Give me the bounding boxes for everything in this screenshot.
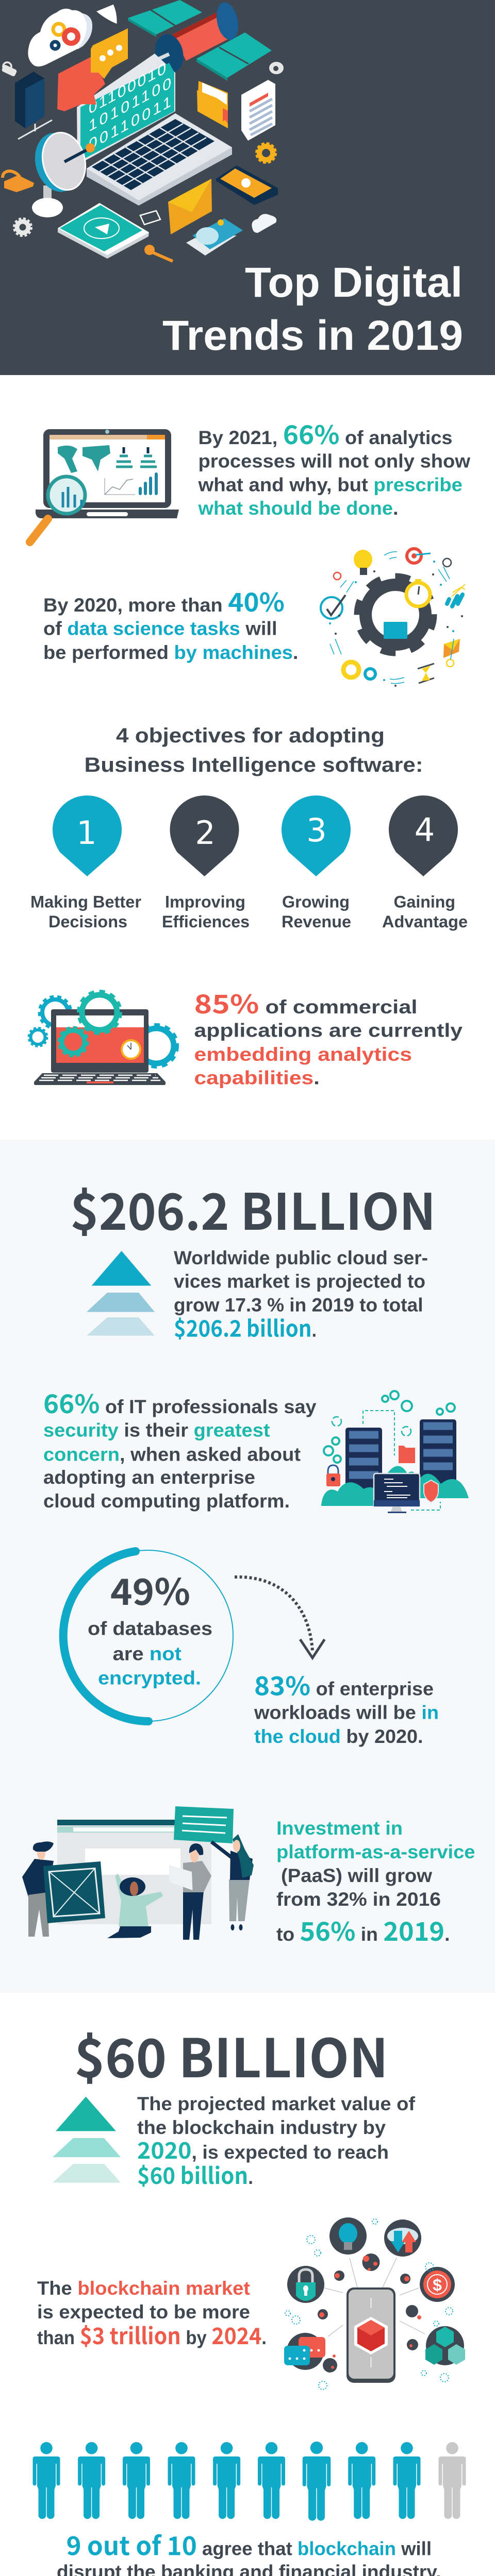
icon: bulb circle — [329, 2217, 367, 2255]
icon: teal stacked pyramid — [53, 2097, 121, 2182]
panel: cloud section background — [0, 1140, 495, 1993]
objective 1: Making Better — [30, 892, 141, 911]
objective 3: Growing — [282, 892, 350, 911]
text: blockchain industry value: $60 billion. — [137, 2158, 253, 2191]
icon: yellow speech bubble — [91, 28, 128, 79]
illustration: blockchain phone network — [284, 2217, 465, 2389]
text: 9 out of 10 agree: 9 out of 10 agree that blockchain will — [66, 2526, 432, 2563]
small node dots — [318, 2270, 421, 2372]
icon: red speech bubble — [57, 56, 105, 111]
text: blockchain industry value: the blockchain industry by — [137, 2117, 386, 2138]
text: 66 percent analytics: By 2021, 66% of analytics — [198, 415, 453, 452]
callout: 49 percent databases — [62, 1550, 233, 1721]
heading: 4 objectives: Business Intelligence software: — [85, 754, 423, 776]
text: 3 trillion blockchain market: is expected to be more — [37, 2301, 250, 2323]
icon: folder — [197, 81, 228, 128]
icon: tablet with play button — [58, 203, 149, 259]
figure: kneeling person — [107, 1874, 163, 1938]
heading: 206.2 billion: $206.2 BILLION — [70, 1172, 436, 1244]
objective 4: Advantage — [382, 912, 468, 931]
icon: satellite — [128, 0, 272, 81]
text: public cloud market: Worldwide public cloud ser- — [174, 1247, 428, 1268]
icon: yellow gear — [256, 143, 276, 163]
pictogram: 9 of 10 people — [33, 2442, 466, 2521]
panel: header — [0, 0, 495, 375]
icon: small diamond — [140, 211, 160, 225]
icon: dollar coin: $ — [433, 2276, 442, 2294]
icon: key — [144, 245, 173, 261]
icon: laptop with binary screen: 00110011 — [89, 92, 171, 154]
text: platform as a service: Investment in — [276, 1818, 403, 1839]
icon: laptop with magnifying glass — [30, 429, 179, 542]
objective 1: Decisions — [48, 912, 127, 931]
objective 4 — [382, 795, 468, 931]
text: 66 percent analytics: what and why, but prescribe — [197, 474, 463, 496]
text: 66 percent analytics: what should be done . — [197, 498, 398, 519]
heading: 4 objectives: 4 objectives for adopting — [116, 724, 385, 747]
text: 83 percent workloads: workloads will be in — [254, 1702, 439, 1723]
heading: 4 objectives — [85, 724, 423, 776]
icon: lock right — [269, 62, 284, 74]
icon: cloud servers illustration — [321, 1391, 469, 1513]
text: 40 percent data science: of data science tasks will — [43, 618, 277, 639]
text: platform as a service: (PaaS) will grow — [281, 1865, 432, 1886]
text: 66 percent security — [43, 1384, 317, 1512]
objective 2: 2 — [195, 814, 216, 852]
text: 66 percent security: adopting an enterprise — [43, 1467, 255, 1488]
icon: envelope — [168, 179, 212, 234]
icon: automation gear illustration — [321, 549, 465, 687]
text: 66 percent security: cloud computing platform. — [43, 1490, 290, 1512]
objective 4: 4 — [415, 811, 435, 849]
title: Trends in 2019 — [162, 312, 463, 359]
sparkle accents — [285, 2219, 453, 2389]
callout: 49 percent databases: of databases — [88, 1618, 212, 1639]
heading: 60 billion: $60 BILLION — [74, 2016, 388, 2093]
icon: blue stacked pyramid — [87, 1251, 155, 1335]
text: 66 percent security: security is their greatest — [43, 1420, 270, 1440]
text: platform as a service: to 56% in 2019. — [276, 1911, 450, 1948]
icon: blocks circle — [425, 2326, 465, 2365]
icon: document — [241, 80, 275, 141]
text: public cloud market: grow 17.3 % in 2019 to total — [174, 1294, 423, 1316]
text: public cloud market: vices market is projected to — [174, 1270, 425, 1292]
text: public cloud market — [174, 1247, 428, 1344]
title: Top Digital — [245, 259, 463, 306]
icon: phone — [216, 165, 278, 205]
icon: cloud arrows circle — [384, 2219, 421, 2257]
text: 40 percent data science: be performed by machines. — [43, 642, 299, 663]
icon: small cloud — [252, 214, 276, 233]
objective 1: 1 — [76, 814, 97, 852]
callout: 49 percent databases: are not — [112, 1643, 182, 1664]
text: 85 percent embedded analytics — [194, 984, 463, 1088]
text: blockchain industry value — [137, 2093, 416, 2191]
icon: network node circle — [362, 2253, 380, 2271]
text: 40 percent data science: By 2020, more than 40% — [43, 582, 285, 619]
illustration: isometric technology laptop — [1, 0, 284, 261]
objective 3: Revenue — [282, 912, 351, 931]
icon: laptop with gears — [29, 991, 177, 1085]
objective 2 — [162, 795, 250, 931]
icon: shield — [96, 4, 117, 24]
objective 3 — [282, 795, 351, 931]
text: public cloud market: $206.2 billion. — [174, 1311, 317, 1344]
callout: 49 percent databases: 49% — [110, 1564, 190, 1616]
objective 3: 3 — [306, 811, 327, 849]
objective 4: Gaining — [394, 892, 455, 911]
figure: woman holding card — [211, 1834, 254, 1930]
icon: dollar coin — [420, 2267, 455, 2302]
text: 85 percent embedded analytics: 85% of commercial — [194, 984, 418, 1021]
icon: credit cards — [186, 218, 243, 256]
icon: lock circle — [287, 2266, 324, 2303]
icon: laptop with binary screen: 10101100 — [89, 74, 171, 135]
icon: orange padlock — [3, 171, 34, 192]
icon: laptop with binary screen: 01100010 — [89, 59, 166, 118]
objective 2: Improving — [165, 892, 245, 911]
text: 83 percent workloads: 83% of enterprise — [254, 1666, 434, 1703]
text: blockchain industry value: 2020, is expected to reach — [137, 2132, 389, 2165]
text: 66 percent security: concern, when asked about — [43, 1444, 301, 1465]
text: 3 trillion blockchain market — [37, 2278, 267, 2351]
text: 66 percent analytics — [197, 415, 470, 519]
icon: white gear — [14, 218, 31, 236]
text: blockchain industry value: The projected market value of — [137, 2093, 416, 2114]
figure: left person with frame — [22, 1841, 105, 1937]
text: 66 percent security: 66% of IT professionals say — [43, 1384, 317, 1421]
icon: chat bubbles circle — [284, 2333, 325, 2370]
arrow: databases to workloads — [235, 1577, 325, 1658]
illustration: team building a web page — [22, 1806, 254, 1940]
icon: cloud with gears — [28, 9, 92, 66]
text: 3 trillion blockchain market: The blockchain market — [37, 2278, 250, 2299]
text: 83 percent workloads — [254, 1666, 439, 1747]
icon: laptop with binary screen — [77, 54, 232, 206]
icon: satellite dish — [29, 127, 95, 217]
callout: 49 percent databases: encrypted. — [98, 1667, 201, 1689]
text: platform as a service — [276, 1818, 475, 1948]
objective 1 — [30, 795, 141, 931]
figure: man with paper — [169, 1843, 211, 1940]
text: 3 trillion blockchain market: than $3 trillion by 2024. — [37, 2318, 267, 2351]
objective 2: Efficiences — [162, 912, 250, 931]
text: 85 percent embedded analytics: capabilities . — [194, 1067, 320, 1088]
text: 40 percent data science — [43, 582, 299, 663]
text: platform as a service: from 32% in 2016 — [276, 1889, 441, 1910]
title — [162, 259, 463, 359]
text: 83 percent workloads: the cloud by 2020. — [254, 1726, 423, 1747]
text: 85 percent embedded analytics: embedding analytics — [194, 1044, 412, 1065]
text: platform as a service: platform-as-a-service — [276, 1841, 475, 1862]
icon: server tower — [15, 72, 52, 139]
text: 85 percent embedded analytics: applications are currently — [194, 1020, 463, 1041]
text: 66 percent analytics: processes will not only show — [198, 450, 470, 472]
icon: lock left — [1, 62, 18, 77]
